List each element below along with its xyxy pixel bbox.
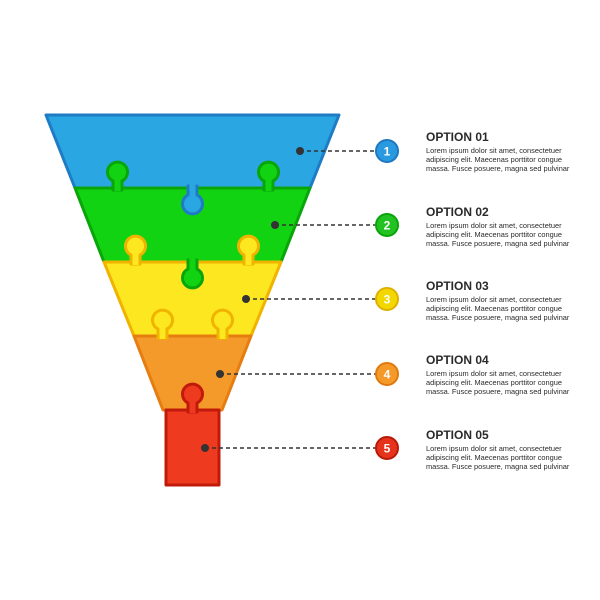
band: green	[75, 188, 310, 262]
connectors	[201, 147, 376, 452]
text blocks: massa. Fusce posuere, magna sed pulvinar	[426, 387, 570, 396]
text blocks: massa. Fusce posuere, magna sed pulvinar	[426, 462, 570, 471]
funnel	[46, 115, 339, 485]
band: yellow	[104, 262, 281, 336]
knobs: green up	[107, 162, 278, 191]
number badges	[376, 140, 398, 459]
text blocks: OPTION 05	[426, 428, 489, 442]
knobs: yellow up	[126, 236, 258, 265]
number badges: 5	[384, 442, 391, 456]
knob: red up	[182, 384, 202, 413]
text blocks: adipiscing elit. Maecenas porttitor congue	[426, 304, 562, 313]
band: orange	[134, 336, 251, 410]
text blocks: OPTION 01	[426, 130, 489, 144]
text blocks: Lorem ipsum dolor sit amet, consectetuer	[426, 369, 562, 378]
text blocks: adipiscing elit. Maecenas porttitor congue	[426, 155, 562, 164]
text blocks: Lorem ipsum dolor sit amet, consectetuer	[426, 295, 562, 304]
band: red	[166, 410, 219, 485]
text blocks: Lorem ipsum dolor sit amet, consectetuer	[426, 146, 562, 155]
text blocks: OPTION 02	[426, 205, 489, 219]
text blocks: massa. Fusce posuere, magna sed pulvinar	[426, 164, 570, 173]
text blocks: OPTION 03	[426, 279, 489, 293]
text blocks: adipiscing elit. Maecenas porttitor congue	[426, 230, 562, 239]
text blocks: Lorem ipsum dolor sit amet, consectetuer	[426, 221, 562, 230]
text blocks: massa. Fusce posuere, magna sed pulvinar	[426, 313, 570, 322]
text blocks: massa. Fusce posuere, magna sed pulvinar	[426, 239, 570, 248]
text blocks: OPTION 04	[426, 353, 489, 367]
number badges: 1	[384, 144, 391, 158]
number badges: 3	[384, 292, 391, 306]
knobs: blue down	[182, 184, 202, 214]
knobs: green down	[182, 258, 202, 288]
text blocks: adipiscing elit. Maecenas porttitor congue	[426, 453, 562, 462]
number badges: 2	[384, 218, 391, 232]
text blocks: Lorem ipsum dolor sit amet, consectetuer	[426, 444, 562, 453]
knobs: yellow/orange	[153, 310, 232, 339]
text blocks	[426, 130, 570, 471]
band: blue	[46, 115, 339, 188]
number badges: 4	[384, 368, 391, 382]
text blocks: adipiscing elit. Maecenas porttitor congue	[426, 378, 562, 387]
